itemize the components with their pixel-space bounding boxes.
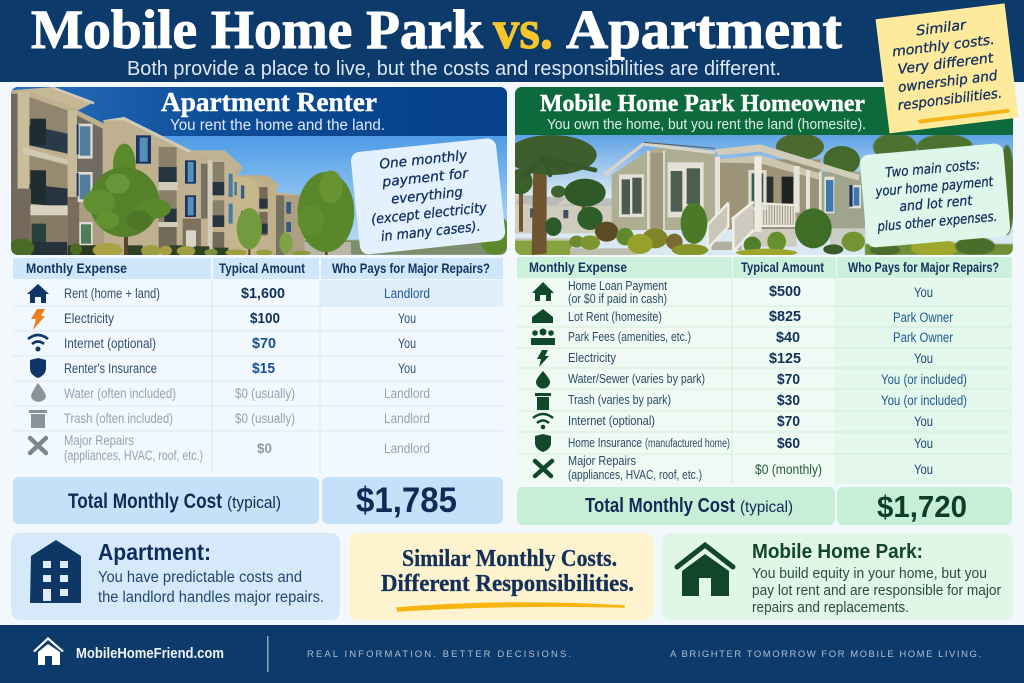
row: trash: $30	[777, 392, 800, 409]
total: mobile home: Total Monthly Cost	[585, 495, 735, 517]
mobile home heading text: Mobile Home Park Homeowner	[540, 91, 865, 117]
row: park fees: Park Owner	[893, 330, 953, 345]
subtitle: Both provide a place to live, but the costs and responsibilities are different.	[127, 58, 781, 80]
title: Apartment	[566, 0, 843, 60]
row: home loan: $500	[769, 283, 801, 300]
title: vs.	[493, 0, 553, 60]
summary: similar costs	[349, 533, 654, 620]
row: home insurance: (manufactured home)	[645, 438, 730, 450]
row: lot rent: Lot Rent (homesite)	[568, 309, 662, 324]
row: water	[31, 383, 430, 402]
summary: similar costs: Different Responsibilities.	[381, 571, 634, 597]
row: internet: Internet (optional)	[64, 336, 156, 351]
row: rent: Rent (home + land)	[64, 286, 160, 301]
row: internet: You	[398, 336, 416, 351]
callout: two main costs: and lot rent	[899, 193, 973, 215]
summary: mobile home park: repairs and replacements.	[752, 599, 909, 616]
callout: two main costs: your home payment	[874, 174, 994, 200]
row: water and sewer: Water/Sewer (varies by park)	[568, 371, 705, 386]
row: water and sewer: $70	[777, 371, 800, 388]
row: electricity: $100	[250, 310, 280, 327]
table header	[13, 258, 503, 279]
title	[31, 0, 843, 60]
callout: one monthly payment	[350, 138, 506, 255]
table header: Monthly Expense	[529, 259, 627, 275]
row: electricity: $125	[769, 350, 801, 367]
row: internet: You	[914, 414, 933, 429]
row: rent: Landlord	[384, 286, 430, 301]
row: electricity: Electricity	[64, 311, 114, 326]
row: home insurance: $60	[777, 435, 800, 452]
heading band	[515, 87, 1013, 135]
table: apartment expenses	[13, 258, 503, 473]
summary: apartment: Apartment:	[98, 539, 211, 565]
sticky note: ownership and	[897, 68, 999, 96]
table header: Typical Amount	[741, 259, 824, 275]
row: trash: $0 (usually)	[235, 411, 295, 426]
total: apartment	[13, 477, 503, 524]
table header	[517, 257, 1012, 278]
sticky note: Very different	[897, 50, 995, 78]
row: park fees: $40	[776, 329, 800, 346]
footer: REAL INFORMATION. BETTER DECISIONS.	[307, 649, 571, 660]
mobile home heading text	[540, 91, 866, 133]
icon: apartment building	[30, 540, 81, 603]
callout: one monthly payment: One monthly	[379, 148, 469, 173]
table: mobile home expenses	[517, 257, 1012, 485]
row: rent	[27, 284, 430, 303]
row: renter's insurance: You	[398, 361, 416, 376]
row: home loan: You	[914, 285, 933, 300]
apartment heading text	[161, 87, 385, 134]
total: mobile home: $1,720	[877, 489, 967, 524]
row: internet	[533, 413, 933, 430]
photo: trees and shrubs	[9, 144, 354, 258]
callout: two main costs	[859, 143, 1011, 248]
row: renter's insurance: $15	[252, 360, 275, 377]
row: rent: $1,600	[241, 285, 285, 302]
mobile home heading text: You own the home, but you rent the land (homesite).	[547, 117, 866, 133]
row: electricity	[537, 350, 933, 367]
row: renter's insurance	[30, 358, 416, 378]
row: electricity: You	[398, 311, 416, 326]
icon: house	[677, 545, 733, 596]
apartment heading text: Apartment Renter	[161, 87, 377, 117]
total: apartment: Total Monthly Cost	[68, 490, 222, 513]
row: major repairs: (appliances, HVAC, roof, etc.)	[64, 448, 203, 463]
summary: mobile home park: You build equity in your home, but you	[752, 565, 987, 582]
callout: two main costs: plus other expenses.	[876, 209, 998, 235]
table header: Typical Amount	[219, 260, 305, 276]
row: major repairs	[30, 433, 430, 463]
row: electricity: Electricity	[568, 350, 616, 365]
total: mobile home	[517, 487, 1012, 525]
row: lot rent: Park Owner	[893, 310, 953, 325]
row: trash: Landlord	[384, 411, 430, 426]
footer: A BRIGHTER TOMORROW FOR MOBILE HOME LIVING.	[670, 649, 981, 660]
row: major repairs: $0 (monthly)	[755, 462, 822, 477]
row: park fees: Park Fees (amenities, etc.)	[568, 329, 691, 344]
summary: apartment	[11, 533, 340, 620]
row: water and sewer: You (or included)	[881, 372, 967, 387]
row: trash: You (or included)	[881, 393, 967, 408]
callout: one monthly payment: everything	[390, 184, 464, 208]
row: lot rent	[532, 308, 953, 325]
callout: one monthly payment: (except electricity	[370, 200, 488, 228]
total: mobile home: (typical)	[740, 499, 793, 516]
row: major repairs: You	[914, 462, 933, 477]
panel: apartment renter photo and heading	[9, 87, 511, 258]
sticky note: responsibilities.	[897, 85, 1003, 114]
row: trash: Trash (often included)	[64, 411, 173, 426]
row: home insurance: You	[914, 436, 933, 451]
row: water: Landlord	[384, 386, 430, 401]
row: trash	[535, 392, 967, 410]
callout: two main costs: Two main costs:	[885, 157, 981, 181]
row: trash	[29, 410, 430, 428]
title: Mobile Home Park	[31, 0, 483, 60]
row: home insurance: Home Insurance	[568, 435, 642, 450]
summary: mobile home park: pay lot rent and are responsible for major	[752, 582, 1001, 599]
footer	[0, 625, 1024, 683]
icon: footer logo house	[33, 637, 64, 665]
row: major repairs	[535, 453, 933, 482]
row: major repairs: (appliances, HVAC, roof, etc.)	[568, 467, 702, 482]
photo: apartment buildings	[11, 87, 351, 257]
row: major repairs: Landlord	[384, 441, 430, 456]
sticky note: Similar	[915, 17, 968, 39]
summary: mobile home park	[662, 533, 1013, 620]
header banner	[0, 0, 1024, 82]
summary: mobile home park: Mobile Home Park:	[752, 541, 923, 563]
row: home loan: (or $0 if paid in cash)	[568, 291, 667, 306]
row: water and sewer	[536, 371, 967, 389]
summary: similar costs: Similar Monthly Costs.	[402, 546, 617, 572]
total: apartment: (typical)	[227, 493, 281, 512]
row: major repairs: Major Repairs	[64, 433, 134, 448]
total: apartment: $1,785	[356, 481, 457, 520]
footer: MobileHomeFriend.com	[76, 646, 224, 662]
row: major repairs: Major Repairs	[568, 453, 636, 468]
row: trash: Trash (varies by park)	[568, 392, 671, 407]
photo: right side background	[865, 133, 1015, 257]
row: electricity: You	[914, 351, 933, 366]
callout: one monthly payment: payment for	[380, 165, 470, 191]
row: internet: Internet (optional)	[568, 413, 655, 428]
callout: one monthly payment: in many cases).	[380, 219, 481, 245]
apartment heading text: You rent the home and the land.	[170, 117, 385, 134]
photo: far trees and low buildings	[300, 215, 511, 255]
row: internet: $70	[252, 335, 276, 352]
row: internet: $70	[777, 413, 800, 430]
row: major repairs: $0	[257, 440, 272, 456]
row: home insurance	[535, 434, 933, 452]
panel: mobile home photo and heading	[507, 87, 1015, 257]
row: park fees	[531, 328, 953, 346]
table header: Who Pays for Major Repairs?	[332, 260, 490, 276]
row: water: $0 (usually)	[235, 386, 295, 401]
row: water: Water (often included)	[64, 386, 176, 401]
row: internet	[28, 335, 416, 352]
row: home loan: Home Loan Payment	[568, 278, 667, 293]
row: electricity	[31, 309, 416, 330]
table header: Monthly Expense	[26, 260, 127, 276]
sticky note: monthly costs.	[891, 32, 995, 60]
photo: mobile home and palms	[507, 133, 865, 257]
row: home loan	[532, 278, 933, 306]
sticky note	[876, 3, 1019, 133]
row: renter's insurance: Renter's Insurance	[64, 361, 157, 376]
summary: apartment: the landlord handles major repairs.	[98, 589, 324, 606]
heading band	[11, 87, 507, 136]
row: lot rent: $825	[769, 308, 801, 325]
summary: apartment: You have predictable costs and	[98, 569, 302, 586]
